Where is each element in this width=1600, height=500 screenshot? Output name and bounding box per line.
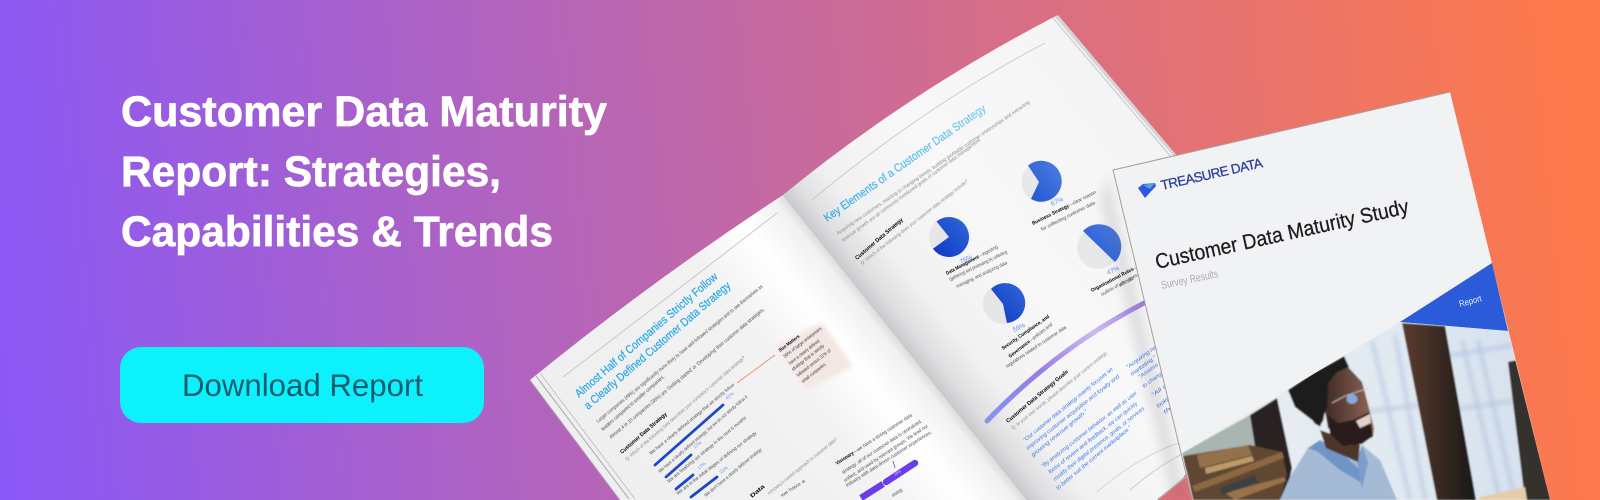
pie chart: security and governance 59%: regulations related to customer data (1005, 325, 1068, 370)
photo window background (1180, 320, 1555, 500)
strategy goals heading: Q: In your own words, please describe your current strategy. (1010, 350, 1109, 432)
title: Customer Data Maturity (121, 88, 607, 136)
photo wooden shelf (1183, 445, 1287, 500)
cover subtitle: Survey Results (1160, 268, 1220, 292)
left page bar chart: customer data strategy: Customer Data Strategy (619, 411, 669, 456)
left page bar chart: customer data strategy: 17% (696, 461, 707, 471)
left page heading: Almost Half of Companies Strictly Follow (573, 271, 721, 400)
photo man: shirt (1280, 440, 1397, 500)
strategy goals quotes: "Assess our (1138, 355, 1170, 381)
strategy goals quotes: to better suit the current marketplace." (1055, 425, 1134, 492)
left page lower question: Data (749, 483, 767, 500)
strategy goals heading: Customer Data Strategy Goals (1005, 369, 1070, 425)
visionary text block: strategy (891, 487, 904, 499)
left page bar chart: customer data strategy: 21% (718, 465, 729, 475)
pie chart: data management 75%: Data Management—ingesting (945, 244, 999, 277)
left page sheet (530, 195, 1027, 500)
left page lower question: company's current approach to customer data? (766, 437, 839, 497)
pie chart: organizational roles 47% (1077, 224, 1139, 298)
left page intro text: Larger companies (49%) are significantly more likely to have well-followed strategies and to see themselves as (595, 284, 765, 425)
title: Report: Strategies, (121, 148, 501, 196)
pie chart: organizational roles 47%: 47% (1106, 265, 1121, 277)
strategy goals quotes: modify their digital presence, goals, or services (1052, 406, 1146, 483)
strategy goals quotes: "By analyzing customer behavior, as well as user (1041, 390, 1139, 470)
cover photo: man with glasses (1180, 320, 1555, 500)
right page subheading: Customer Data Strategy (854, 217, 905, 262)
left page bar chart: customer data strategy: 41% (724, 391, 735, 401)
cover title: Customer Data Maturity Study (1153, 195, 1411, 274)
visionary text block: unified, and used by relevant groups. We lead our (843, 423, 930, 484)
callout connector arrow (737, 355, 775, 383)
callout box: size matters: 50% of large enterprises (783, 326, 823, 359)
pie chart: data management 75%: 75% (959, 254, 974, 266)
strategy goals quotes: "Acquiring new (1126, 342, 1162, 371)
open report booklet (530, 15, 1300, 500)
photo left dark column (1250, 398, 1292, 500)
left page bar chart: customer data strategy: Q: Which of the following best describes your company's customer data strategy? (624, 355, 747, 463)
photo tan desk (1478, 487, 1527, 500)
strategy goals quotes: looking (1156, 392, 1176, 410)
strategy goals quotes: "All of (1151, 381, 1172, 399)
callout box: size matters: Size Matters (778, 334, 801, 353)
strategy goals quotes (1022, 342, 1176, 492)
photo blurred scene (1180, 320, 1555, 500)
callout box: size matters (775, 322, 853, 390)
strategy goals quotes: "Our customer data strategy mainly focuses on (1022, 367, 1114, 444)
download button: Download Report (182, 367, 423, 403)
purple arc divider (987, 299, 1152, 421)
left page heading: a Clearly Defined Customer Data Strategy (582, 280, 733, 412)
strategy goals quotes: forms of review and feedback, we can quickly (1048, 400, 1140, 476)
left page intro text: leaders compared to smaller companies. (600, 374, 666, 433)
visionary text block: industry with data-driven customer experiences. (845, 430, 933, 489)
pie chart: business strategy 67% (1022, 161, 1098, 233)
callout box: size matters: followed versus 31% of (796, 348, 832, 378)
pie chart: data management 75%: (gathering) and processing by collecting (948, 249, 1009, 283)
left page bar chart: customer data strategy: We have a clearly defined strategy that we strictly follow (648, 382, 736, 457)
maturity bar: visionary (861, 461, 915, 498)
maturity bar: visionary: 29% (893, 469, 902, 477)
blue report corner: Report (1458, 293, 1483, 309)
right page subheading: Q: Which of the following does your customer data strategy include? (860, 179, 970, 267)
cover shadow on booklet (1100, 175, 1188, 500)
pie chart: business strategy 67%: 67% (1050, 196, 1065, 208)
title (121, 88, 607, 256)
visionary text block (835, 413, 933, 499)
right page sheet (783, 15, 1300, 500)
pie chart: security and governance 59% (983, 283, 1068, 370)
strategy goals quotes: improving customer acquisition and loyalty and (1026, 374, 1122, 452)
left page bar chart: customer data strategy: 17% (692, 440, 703, 450)
pie chart: data management 75% (929, 217, 1009, 290)
cover sheet (1113, 92, 1550, 500)
left page bar chart: customer data strategy (619, 355, 764, 499)
download button (120, 347, 484, 423)
strategy goals quotes: to changing (1142, 367, 1170, 390)
left page intro text: Almost 4 in 10 companies (36%) are 'Getting started' or 'Developing' their customer data strategies. (608, 307, 766, 441)
blue report corner (1400, 263, 1508, 331)
visionary text block: Visionary—we have a strong customer data (835, 413, 914, 467)
strategy goals quotes: marketing." (1130, 355, 1158, 378)
pie chart: business strategy 67%: for collecting customer data (1040, 200, 1097, 233)
visionary text block: strategy; all of our customer data is centralized, (841, 418, 923, 476)
callout box: size matters: have a clearly defined (788, 338, 821, 366)
cover logo: TREASURE DATA (1159, 155, 1264, 193)
pie chart: business strategy 67%: Business Strategy—clear reason (1031, 190, 1098, 227)
left page bar chart: customer data strategy: We are in the initial stages of defining our strategy (676, 430, 758, 497)
photo left wall (1182, 415, 1258, 470)
callout box: size matters: strategy that is strictly (791, 343, 826, 372)
report cover (1113, 92, 1555, 500)
right page heading: Key Elements of a Customer Data Strategy (822, 103, 989, 224)
left page bar chart: customer data strategy: We are finalizing our strategy in the next 6 months (666, 415, 748, 485)
photo right dark panel (1508, 360, 1552, 500)
pie chart: data management 75%: managing, and analyzing data (955, 260, 1009, 290)
left page bar chart: customer data strategy: We have a clearly defined strategy, but we do not strictly follow it (657, 394, 750, 475)
pie chart: security and governance 59%: 59% (1012, 322, 1027, 334)
strategy goals quotes: growing revenue growth." (1030, 408, 1090, 459)
left page lower question: we have a (780, 478, 807, 499)
right page intro text: Acquiring new customers, reacting to changing trends, building profitable customer relationships and extracting (836, 100, 1031, 237)
photo dark pillar (1402, 323, 1476, 500)
pie chart: security and governance 59%: Governance—policies and (1008, 322, 1054, 360)
photo man: head (1288, 356, 1374, 462)
title: Capabilities & Trends (121, 208, 553, 256)
pie chart: security and governance 59%: Security, Compliance, and (1001, 314, 1051, 352)
callout box: size matters: small companies. (801, 361, 827, 384)
strategy goals quotes: the (1163, 404, 1176, 416)
right page intro text: revenue growth are all commonly mentioned goals of customer data management. (841, 137, 983, 244)
left page lower question (749, 437, 839, 500)
left page bar chart: customer data strategy: We don't have a clearly defined strategy (703, 447, 764, 499)
pie chart: organizational roles 47%: with data (1118, 276, 1135, 289)
pie chart: organizational roles 47%: outline of who does (1100, 272, 1139, 298)
pie chart: organizational roles 47%: Organizational Roles— (1090, 264, 1139, 294)
